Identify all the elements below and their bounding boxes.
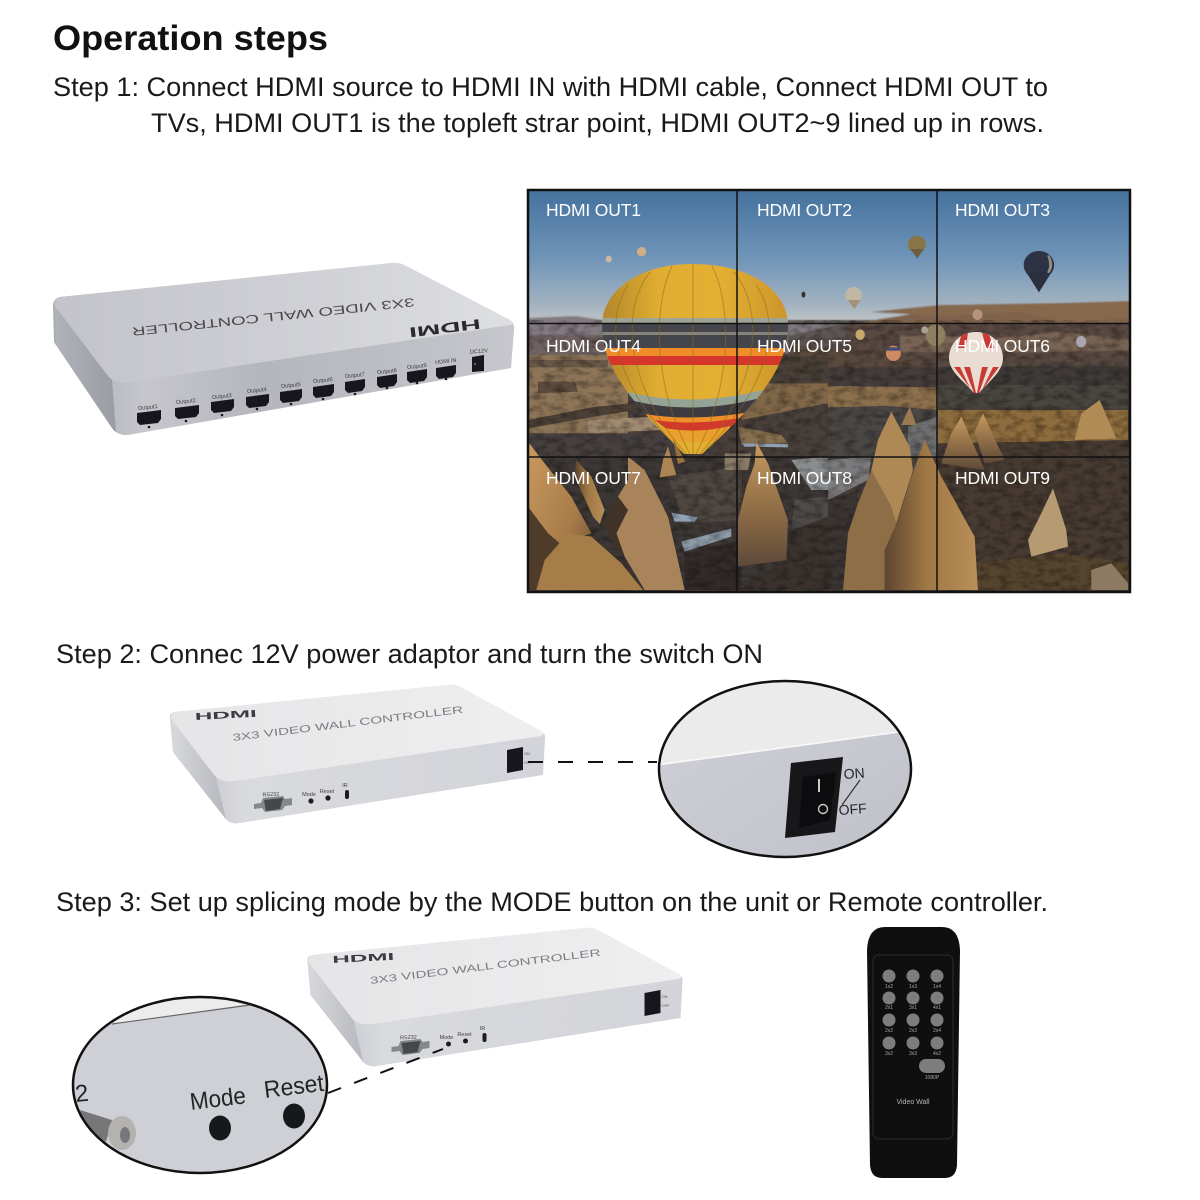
zoom labels: Reset — [262, 1070, 326, 1104]
port labels: Output8 — [377, 368, 397, 376]
HDMI OUT labels — [546, 200, 1050, 488]
remote button labels: 1x4 — [933, 984, 941, 990]
control labels: Reset — [457, 1032, 472, 1038]
control labels — [400, 1026, 485, 1041]
zoom labels: Mode — [188, 1082, 247, 1116]
RS232 connector — [254, 796, 292, 812]
text block: step 1 — [53, 72, 1048, 138]
front controls — [308, 790, 349, 804]
power switch: OFF — [662, 1003, 670, 1008]
control labels: IR — [480, 1026, 485, 1032]
remote caption: Video Wall — [896, 1099, 930, 1106]
remote button labels: 3x3 — [909, 1051, 917, 1057]
remote button labels: 2x4 — [933, 1028, 941, 1034]
port labels: Output7 — [345, 372, 365, 380]
port labels: Output1 — [138, 404, 158, 412]
remote button labels — [885, 984, 941, 1081]
rock formations left — [528, 438, 788, 590]
remote button labels: 4x2 — [933, 1051, 941, 1057]
device: front view with power switch — [170, 685, 545, 823]
control labels: Reset — [320, 789, 335, 795]
HDMI OUT labels: HDMI OUT6 — [955, 336, 1050, 356]
power switch: ON — [524, 751, 530, 756]
text block: step 1: Step 1: Connect HDMI source to HDMI IN with HDMI cable, Connect HDMI OUT to — [53, 72, 1048, 102]
buttons — [209, 1104, 305, 1140]
remote button labels: 1x2 — [885, 984, 893, 990]
landscape base — [528, 190, 1130, 592]
device: front view with mode button — [307, 928, 683, 1066]
device label: 3X3 VIDEO WALL CONTROLLER — [232, 705, 464, 744]
magnifier: power switch — [658, 680, 912, 858]
port labels: Output6 — [313, 377, 333, 385]
text block: step 1: TVs, HDMI OUT1 is the topleft strar point, HDMI OUT2~9 lined up in rows. — [151, 108, 1044, 138]
power switch — [644, 990, 670, 1016]
control labels: Mode — [440, 1035, 453, 1041]
zoom labels: 2 — [74, 1080, 90, 1108]
on/off labels: OFF — [838, 800, 867, 818]
remote button labels: 2x2 — [885, 1028, 893, 1034]
on/off labels — [839, 768, 866, 815]
HDMI OUT labels: HDMI OUT9 — [955, 468, 1050, 488]
dashed connector to power switch — [525, 761, 657, 763]
port labels: Output9 — [407, 363, 427, 371]
HDMI output ports — [137, 365, 456, 428]
HDMI OUT labels: HDMI OUT8 — [757, 468, 852, 488]
main balloon — [600, 264, 790, 454]
control labels: Mode — [302, 792, 316, 798]
remote button labels: 2x3 — [909, 1028, 917, 1034]
text block: step 2: Step 2: Connec 12V power adaptor and turn the switch ON — [56, 639, 763, 669]
terrain right half — [828, 367, 1128, 590]
port labels: Output4 — [247, 387, 267, 395]
zoom labels — [76, 1076, 324, 1110]
remote button labels: 3x1 — [909, 1005, 917, 1011]
port labels: Output5 — [281, 382, 301, 390]
terrain left half — [528, 355, 828, 590]
HDMI OUT labels: HDMI OUT7 — [546, 468, 641, 488]
small balloons — [606, 236, 1086, 361]
HDMI OUT labels: HDMI OUT2 — [757, 200, 852, 220]
HDMI OUT labels: HDMI OUT3 — [955, 200, 1050, 220]
HDMI OUT labels: HDMI OUT5 — [757, 336, 852, 356]
rock formations right — [843, 400, 1128, 590]
panel: video wall photo — [528, 190, 1130, 592]
connector screw — [80, 1110, 136, 1150]
remote button labels: 2x1 — [885, 1005, 893, 1011]
remote button labels: 1080P — [925, 1075, 940, 1081]
port labels: HDMI IN — [435, 358, 457, 366]
rocker switch — [785, 757, 843, 838]
port labels: Output2 — [176, 398, 196, 406]
power switch — [507, 747, 533, 773]
remote controller — [867, 927, 960, 1178]
grid lines — [528, 190, 1130, 592]
device label: 3X3 VIDEO WALL CONTROLLER — [370, 948, 601, 987]
port labels — [138, 348, 488, 412]
HDMI logo: HDMI — [408, 316, 482, 341]
DC power jack — [472, 355, 484, 372]
text block: step 3: Step 3: Set up splicing mode by the MODE button on the unit or Remote controller. — [56, 887, 1048, 917]
power switch: ON — [662, 994, 668, 999]
control labels — [262, 783, 348, 798]
control labels: RS232 — [400, 1035, 417, 1041]
HDMI OUT labels: HDMI OUT4 — [546, 336, 641, 356]
remote button labels: 1x3 — [909, 984, 917, 990]
device label: 3X3 VIDEO WALL CONTROLLER — [131, 295, 415, 339]
dashed connector to mode button — [328, 1049, 443, 1093]
HDMI OUT labels: HDMI OUT1 — [546, 200, 641, 220]
RS232 connector — [392, 1039, 430, 1055]
red and white balloon — [949, 332, 1003, 393]
title: Operation steps — [53, 19, 328, 58]
HDMI logo: HDMI — [195, 709, 258, 723]
HDMI logo: HDMI — [332, 952, 395, 966]
remote buttons — [882, 970, 945, 1073]
power switch: OFF — [524, 760, 533, 765]
control labels: IR — [342, 783, 348, 789]
photo grain — [528, 320, 1130, 592]
on/off labels: ON — [843, 765, 865, 782]
control labels: RS232 — [262, 792, 280, 798]
port labels: DC12V — [470, 348, 488, 356]
remote button labels: 4x1 — [933, 1005, 941, 1011]
remote button labels: 3x2 — [885, 1051, 893, 1057]
device: rear view with HDMI outputs — [53, 263, 514, 435]
port labels: Output3 — [212, 393, 232, 401]
front controls — [446, 1033, 486, 1046]
magnifier: mode and reset buttons — [70, 990, 332, 1175]
